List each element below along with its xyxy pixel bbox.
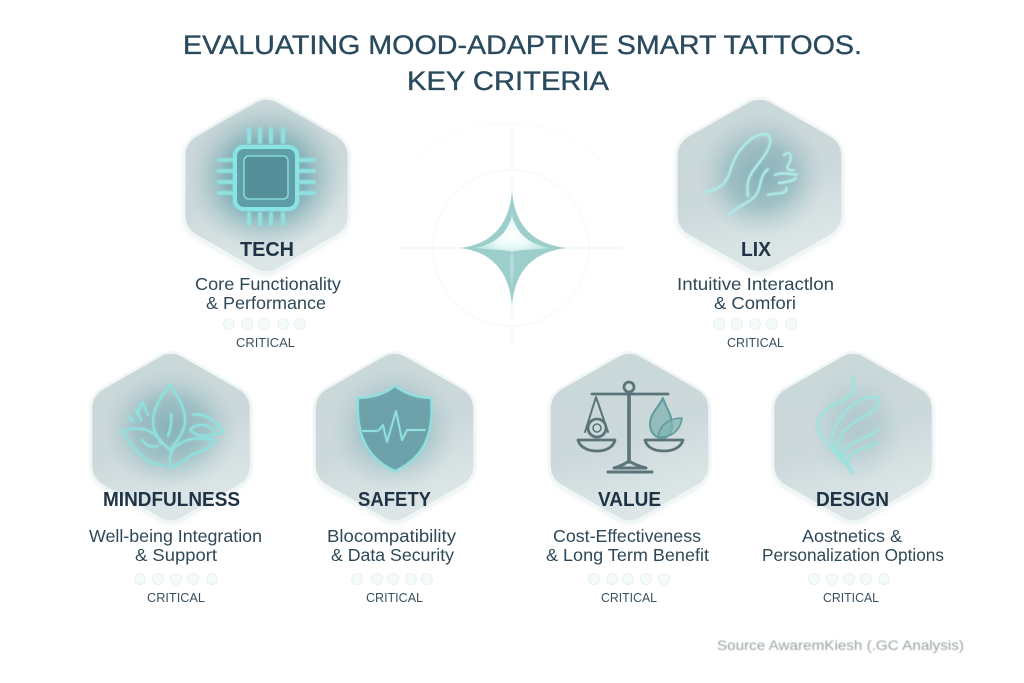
rating dots DESIGN — [808, 574, 890, 584]
description DESIGN: Aostnetics & — [802, 526, 902, 546]
card: LIX — [676, 98, 843, 350]
description LIX: & Comfori — [714, 293, 796, 313]
rating label LIX: CRITICAL — [727, 336, 784, 350]
hexagon LIX — [676, 98, 843, 275]
description MINDFULNESS — [89, 526, 262, 565]
icon: shield with pulse — [358, 386, 431, 471]
rating dots LIX — [714, 318, 796, 330]
card: SAFETY — [314, 352, 474, 605]
description SAFETY: Blocompatibility — [327, 526, 456, 546]
label VALUE: VALUE — [598, 489, 661, 511]
title — [183, 30, 862, 96]
hexagon MINDFULNESS — [91, 352, 251, 524]
rating dots VALUE — [588, 574, 670, 584]
hexagon VALUE — [550, 352, 710, 524]
title: KEY CRITERIA — [407, 66, 609, 96]
rating label SAFETY: CRITICAL — [366, 591, 423, 605]
icon: leaves — [122, 385, 223, 467]
description LIX — [677, 274, 834, 313]
central star emblem — [400, 124, 622, 350]
label SAFETY: SAFETY — [358, 489, 432, 511]
description DESIGN — [762, 526, 944, 565]
label LIX: LIX — [741, 239, 772, 261]
rating dots MINDFULNESS — [134, 574, 218, 584]
description TECH — [195, 274, 341, 313]
rating dots TECH — [224, 318, 306, 330]
description TECH: & Performance — [206, 293, 326, 313]
description LIX: Intuitive Interactlon — [677, 274, 834, 294]
card: MINDFULNESS — [89, 352, 262, 605]
icon: flowing waves — [818, 376, 878, 473]
title: EVALUATING MOOD-ADAPTIVE SMART TATTOOS. — [183, 30, 862, 60]
icon: microchip — [219, 129, 314, 224]
card: DESIGN — [762, 352, 944, 605]
description TECH: Core Functionality — [195, 274, 341, 294]
rating label TECH: CRITICAL — [236, 336, 295, 350]
description MINDFULNESS: Well-being Integration — [89, 526, 262, 546]
card: VALUE — [546, 352, 710, 605]
label DESIGN: DESIGN — [816, 489, 889, 511]
hexagon SAFETY — [314, 352, 474, 524]
description VALUE: Cost-Effectiveness — [553, 526, 701, 546]
card: TECH — [184, 98, 349, 350]
rating label DESIGN: CRITICAL — [823, 591, 879, 605]
description VALUE — [546, 526, 709, 565]
hexagon TECH — [184, 98, 349, 275]
rating dots SAFETY — [352, 574, 432, 584]
icon: balance scale — [578, 382, 683, 472]
label MINDFULNESS: MINDFULNESS — [103, 489, 240, 511]
hexagon DESIGN — [773, 352, 933, 524]
source note: Source AwaremKiesh (.GC Analysis) — [717, 638, 964, 653]
rating label VALUE: CRITICAL — [601, 591, 657, 605]
icon: hand gesture — [705, 134, 797, 215]
description DESIGN: Personalization Options — [762, 545, 944, 565]
description SAFETY: & Data Security — [331, 545, 454, 565]
label TECH: TECH — [240, 239, 294, 261]
description VALUE: & Long Term Benefit — [546, 545, 709, 565]
description MINDFULNESS: & Support — [135, 545, 217, 565]
description SAFETY — [327, 526, 456, 565]
rating label MINDFULNESS: CRITICAL — [147, 591, 205, 605]
